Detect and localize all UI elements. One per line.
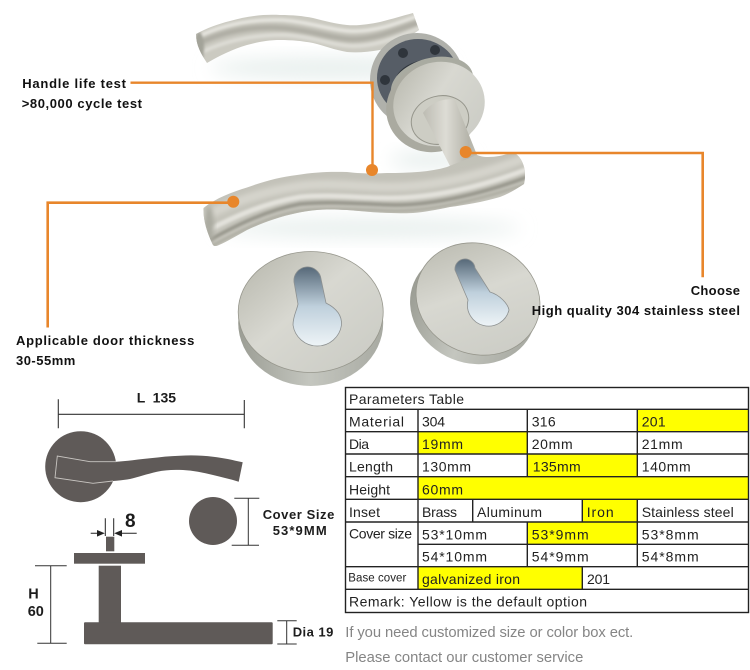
row: inset: Inset xyxy=(349,504,380,520)
row: inset: Aluminum xyxy=(477,504,542,520)
diameter dimension: Dia 19 xyxy=(293,625,333,640)
height dimension xyxy=(28,566,67,643)
row: cover size: 54*9mm xyxy=(532,549,589,565)
photo: right keyhole cover xyxy=(393,224,557,383)
length dimension: L 135 xyxy=(137,390,176,406)
row: cover size: 53*10mm xyxy=(422,526,487,542)
row: dia: 19mm xyxy=(422,436,463,452)
callout detail: thickness range: 30-55mm xyxy=(16,353,75,368)
row: length: 135mm xyxy=(533,459,581,475)
cover circle with size: 53*9MM xyxy=(273,523,327,538)
handle side view xyxy=(74,537,273,644)
photo: rear door handle xyxy=(194,13,420,64)
callout: material choice xyxy=(460,146,740,298)
photo: front door handle xyxy=(200,99,530,247)
callout dot xyxy=(460,146,472,158)
row: base cover: galvanized iron xyxy=(422,571,520,587)
row: cover size: 53*8mm xyxy=(642,526,699,542)
leader line xyxy=(466,153,703,277)
photo background shading xyxy=(0,0,750,385)
table heading: Parameters Table xyxy=(349,391,464,407)
rear rose plate xyxy=(370,33,464,127)
cover circle with size xyxy=(189,497,334,545)
callout detail: cycle test: >80,000 cycle test xyxy=(22,96,143,111)
row: length: 140mm xyxy=(642,459,691,475)
row: height: 60mm xyxy=(422,481,463,497)
row: cover size xyxy=(349,525,699,565)
row: cover size: Cover size xyxy=(349,525,412,541)
row: height: Height xyxy=(349,481,390,497)
callout: handle life test xyxy=(22,76,378,176)
callout dot xyxy=(366,164,378,176)
row: dia: 21mm xyxy=(642,436,683,452)
row: cover size: 53*9mm xyxy=(532,526,589,542)
row: base cover xyxy=(348,571,610,587)
row: inset: Iron xyxy=(587,504,614,520)
front handle lever xyxy=(200,152,530,247)
row: base cover: Base cover xyxy=(348,573,406,585)
table remark: Remark: Yellow is the default option xyxy=(349,594,587,610)
cover circle with size: Cover Size xyxy=(263,507,334,522)
row: inset xyxy=(349,504,734,520)
length dimension xyxy=(58,390,244,428)
row: inset: Brass xyxy=(422,504,457,520)
parameters table xyxy=(346,388,748,612)
mounting screws xyxy=(380,45,440,85)
dimension diagram xyxy=(28,390,334,644)
row: length xyxy=(349,459,691,475)
callout: door thickness xyxy=(16,196,239,348)
width dimension 8: 8 xyxy=(125,511,136,532)
callout text: Applicable door thickness xyxy=(16,333,194,348)
row: material: 316 xyxy=(532,414,556,430)
front handle stem xyxy=(423,99,488,170)
row: base cover: 201 xyxy=(587,571,610,587)
row: dia: Dia xyxy=(349,436,369,452)
rear handle stem xyxy=(380,22,418,62)
row: length: Length xyxy=(349,459,393,475)
front rose plate xyxy=(376,53,490,163)
row: material: 201 xyxy=(642,414,666,430)
row: length: 130mm xyxy=(422,459,471,475)
row: cover size: 54*10mm xyxy=(422,549,487,565)
callout text: Choose xyxy=(691,283,740,298)
table grid xyxy=(346,388,748,612)
photo: left keyhole cover xyxy=(238,252,383,386)
photo: door handle rose and mechanism xyxy=(370,33,494,163)
height dimension: H xyxy=(28,586,39,602)
row: dia xyxy=(349,436,683,452)
callout text: Handle life test xyxy=(22,76,127,91)
handle top view xyxy=(45,431,243,502)
row: dia: 20mm xyxy=(532,436,573,452)
rear handle lever xyxy=(194,13,420,64)
callout detail: stainless steel: High quality 304 stainless steel xyxy=(532,303,740,318)
customization note xyxy=(345,625,633,666)
row: material: Material xyxy=(349,414,404,430)
diameter dimension xyxy=(277,621,333,644)
leader line xyxy=(130,83,372,170)
customization note: Please contact our customer service xyxy=(345,650,583,666)
row: cover size: 54*8mm xyxy=(642,549,699,565)
keyhole xyxy=(293,267,342,346)
row: material xyxy=(349,414,666,430)
leader line xyxy=(48,203,233,328)
customization note: If you need customized size or color box ect. xyxy=(345,625,633,641)
row: height xyxy=(349,481,463,497)
row: inset: Stainless steel xyxy=(642,504,734,520)
row: material: 304 xyxy=(422,414,445,430)
width dimension 8 xyxy=(91,511,137,537)
height dimension: 60 xyxy=(28,604,44,620)
callout dot xyxy=(227,196,239,208)
default option highlights xyxy=(418,409,748,589)
keyhole xyxy=(455,259,509,326)
